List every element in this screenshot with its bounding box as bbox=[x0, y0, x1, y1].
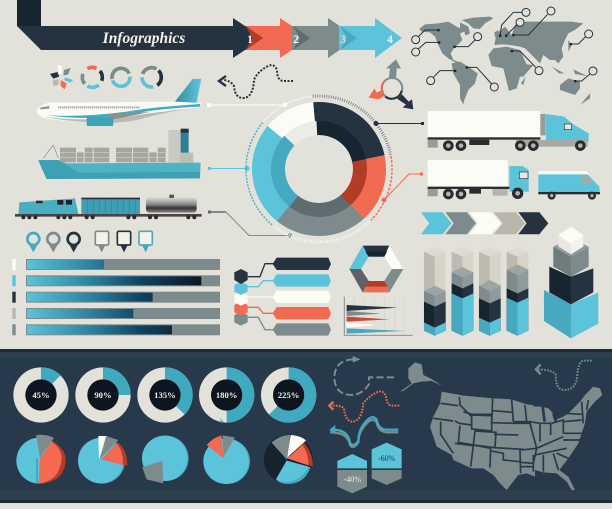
arrow: gray dotted upper right bbox=[536, 361, 592, 390]
connector: truck bbox=[374, 121, 424, 126]
gauge 90% bbox=[75, 367, 131, 423]
title banner with numbered arrows: 3 bbox=[340, 32, 346, 46]
title banner with numbered arrows: 1 bbox=[247, 32, 253, 46]
outer segments bbox=[248, 98, 390, 240]
connector: airplane bbox=[207, 102, 288, 108]
gauge 225%: 225% bbox=[278, 390, 299, 400]
icon: box truck bbox=[428, 160, 529, 199]
icon: van bbox=[538, 171, 600, 200]
isometric pyramid stack bbox=[544, 227, 598, 338]
inner segments bbox=[261, 111, 377, 227]
hexagon ring bbox=[349, 246, 403, 292]
gauge 45% bbox=[13, 367, 69, 423]
badge -40%: -40% bbox=[344, 475, 361, 484]
connector: ship bbox=[208, 166, 250, 171]
column 4 bbox=[507, 247, 528, 336]
isometric stacked columns bbox=[424, 247, 528, 336]
gauge 135% bbox=[137, 367, 193, 423]
title banner with numbered arrows: 4 bbox=[387, 32, 393, 46]
pie 3 bbox=[142, 436, 189, 483]
gauge 45%: 45% bbox=[32, 390, 50, 400]
chevron row bbox=[421, 212, 548, 234]
badge -60%: -60% bbox=[378, 454, 396, 463]
pie 1 bbox=[16, 435, 66, 484]
arrow: blue wavy route bbox=[329, 417, 398, 447]
gauge 180%: 180% bbox=[216, 390, 237, 400]
pie 4 bbox=[203, 435, 250, 484]
pie charts row bbox=[16, 435, 313, 484]
arrow: gray dashed loop bbox=[334, 356, 394, 395]
column 1 bbox=[424, 247, 446, 336]
donut gauges row bbox=[13, 367, 316, 423]
title banner with numbered arrows: Infographics bbox=[102, 30, 185, 47]
chart: main donut bbox=[246, 96, 392, 242]
map: United States bbox=[400, 362, 602, 490]
bar markers bbox=[12, 259, 16, 335]
gauge 180% bbox=[199, 367, 254, 423]
column 2 bbox=[452, 247, 473, 336]
stacked cubes with tags bbox=[234, 258, 331, 336]
connector: train bbox=[208, 210, 292, 238]
gauge 135%: 135% bbox=[154, 390, 176, 400]
icon: semi truck bbox=[428, 111, 589, 151]
world map with location markers bbox=[412, 7, 597, 104]
pie 5 bbox=[264, 435, 313, 484]
small triangle bar chart bbox=[344, 297, 413, 335]
pie 2 bbox=[78, 436, 127, 484]
panel: dark lower band bbox=[0, 349, 612, 503]
title banner with numbered arrows: 2 bbox=[293, 32, 299, 46]
title banner with numbered arrows bbox=[17, 0, 402, 58]
icon: cargo ship bbox=[38, 129, 201, 179]
progress bars bbox=[12, 259, 220, 335]
icon row: cycle rings bbox=[50, 63, 165, 91]
gauge 90%: 90% bbox=[94, 390, 112, 400]
icon: freight train bbox=[15, 195, 202, 219]
icon: direction arrows bbox=[369, 59, 413, 109]
map pins bbox=[27, 231, 152, 252]
dotted outer ring bbox=[246, 96, 392, 242]
connector: red bbox=[382, 172, 423, 202]
arrow: red dotted route bbox=[329, 391, 399, 422]
Alaska bbox=[400, 362, 442, 392]
column 3 bbox=[479, 247, 501, 336]
icon: dotted route arrow bbox=[219, 65, 293, 98]
icon: airplane bbox=[37, 79, 201, 126]
gauge 225% bbox=[261, 367, 316, 423]
hexagon percent badges bbox=[337, 443, 402, 493]
